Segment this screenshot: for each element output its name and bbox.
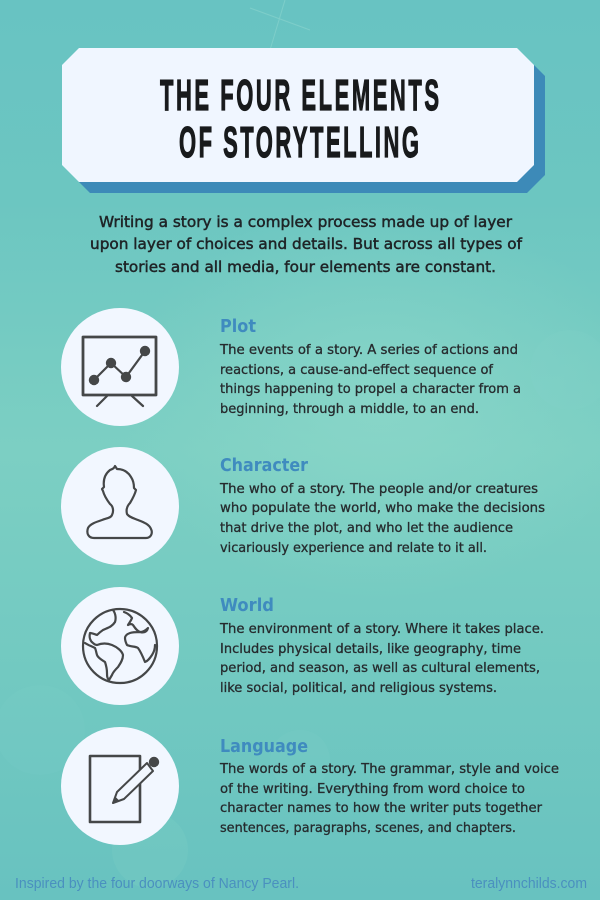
panel: character bbox=[61, 447, 545, 565]
world text: The environment of a story. Where it takes place. bbox=[219, 622, 544, 637]
character text: vicariously experience and relate to it all. bbox=[220, 541, 487, 556]
plot text: beginning, through a middle, to an end. bbox=[220, 402, 479, 417]
footer credit: Inspired by the four doorways of Nancy Pearl. bbox=[15, 876, 299, 892]
intro text: upon layer of choices and details. But across all types of bbox=[90, 235, 523, 253]
character text: The who of a story. The people and/or creatures bbox=[219, 482, 538, 497]
character heading: Character bbox=[220, 456, 308, 476]
panel: language bbox=[61, 727, 559, 845]
intro text bbox=[90, 213, 523, 276]
plot text: reactions, a cause-and-effect sequence of bbox=[220, 363, 493, 378]
banner panel bbox=[62, 48, 534, 182]
plot text: The events of a story. A series of actions and bbox=[219, 343, 518, 358]
footer site: teralynnchilds.com bbox=[471, 876, 587, 892]
title: OF STORYTELLING bbox=[179, 119, 419, 167]
language text: sentences, paragraphs, scenes, and chapters. bbox=[220, 821, 516, 836]
plot text: things happening to propel a character from a bbox=[220, 382, 521, 397]
title: THE FOUR ELEMENTS bbox=[160, 72, 439, 120]
title banner bbox=[62, 48, 545, 193]
icon: globe bbox=[61, 587, 179, 705]
icon: paper and pencil bbox=[61, 727, 179, 845]
language text bbox=[219, 762, 559, 836]
language text: The words of a story. The grammar, style and voice bbox=[219, 762, 559, 777]
title bbox=[160, 72, 439, 167]
language heading: Language bbox=[220, 737, 308, 757]
world text: period, and season, as well as cultural elements, bbox=[220, 661, 540, 676]
intro text: stories and all media, four elements are constant. bbox=[115, 258, 496, 276]
language text: of the writing. Everything from word choice to bbox=[220, 782, 525, 797]
plot heading: Plot bbox=[220, 317, 256, 337]
character text bbox=[219, 482, 545, 556]
language text: character names to how the writer puts together bbox=[220, 801, 542, 816]
intro text: Writing a story is a complex process made up of layer bbox=[99, 213, 513, 231]
banner shadow bbox=[79, 65, 545, 193]
world text bbox=[219, 622, 544, 696]
world text: Includes physical details, like geography, time bbox=[220, 642, 521, 657]
panel: plot bbox=[61, 308, 521, 426]
icon: person bbox=[61, 447, 179, 565]
world heading: World bbox=[220, 596, 274, 616]
panel: world bbox=[61, 587, 544, 705]
plot text bbox=[219, 343, 521, 417]
icon: presentation chart bbox=[61, 308, 179, 426]
character text: that drive the plot, and who let the audience bbox=[220, 521, 513, 536]
character text: who populate the world, who make the decisions bbox=[220, 501, 545, 516]
world text: like social, political, and religious systems. bbox=[220, 681, 497, 696]
